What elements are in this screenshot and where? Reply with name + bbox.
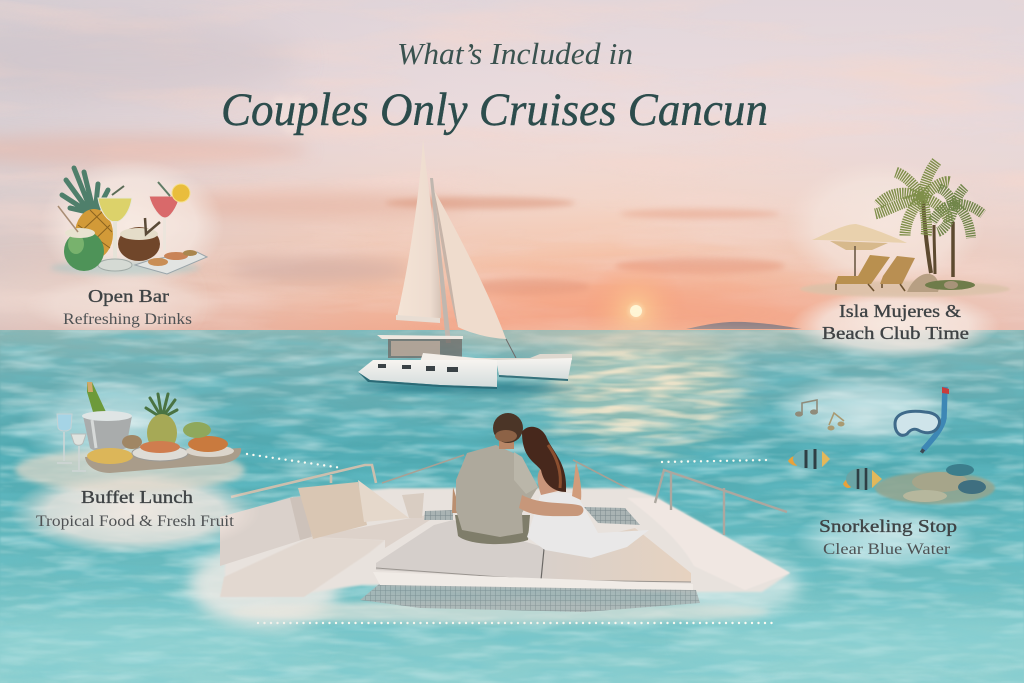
pillow (298, 482, 367, 539)
icon: snorkel mask (895, 387, 949, 452)
decorative route dots (247, 454, 778, 623)
icon: serving tray with food (85, 422, 241, 473)
icon: music notes (795, 400, 844, 430)
icon: wine glasses (57, 414, 86, 471)
left deck rail (231, 465, 376, 497)
label: Isla Mujeres &: Isla Mujeres & (839, 301, 961, 321)
right deck rail (655, 470, 787, 535)
boat deck foreground (190, 413, 800, 627)
sun (584, 259, 688, 363)
main title: Couples Only Cruises Cancun: Couples Only Cruises Cancun (221, 84, 768, 136)
icon: sun loungers (835, 255, 915, 291)
cabin (388, 338, 462, 358)
icon: champagne bucket (82, 382, 132, 452)
label: Beach Club Time: Beach Club Time (822, 323, 969, 343)
label: Open Bar: Open Bar (88, 286, 169, 306)
subtitle: What's Included in: What’s Included in (397, 36, 633, 71)
man's arm (519, 495, 583, 516)
icon: pineapple (62, 168, 113, 259)
catamaran sailboat (353, 138, 577, 393)
sofa back (220, 497, 311, 566)
title (221, 36, 768, 136)
icon: pineapple (146, 394, 177, 452)
icon: coral reef (875, 464, 995, 504)
mattresses (376, 520, 546, 579)
icon: red cocktail (149, 182, 190, 250)
panel: buffet lunch (10, 373, 260, 554)
panel: open bar (25, 159, 225, 335)
icon: beach umbrella (812, 224, 907, 277)
deck surface (225, 488, 790, 594)
distant island (686, 322, 802, 329)
back rails (382, 455, 644, 497)
label: Buffet Lunch: Buffet Lunch (81, 487, 193, 507)
label: Snorkeling Stop: Snorkeling Stop (819, 516, 957, 536)
icon: rocks (907, 274, 975, 292)
icon: yellow cocktail (98, 186, 132, 271)
sofa seat (220, 537, 385, 597)
pillow (358, 480, 409, 522)
panel: snorkeling stop (770, 374, 995, 570)
icon: palm trees (875, 161, 983, 277)
woman (522, 427, 649, 558)
icon: striped fish (788, 449, 830, 469)
icon: striped fish (843, 468, 882, 490)
right hull (450, 354, 572, 360)
label: Clear Blue Water: Clear Blue Water (823, 541, 951, 558)
icon: green coconut (58, 206, 104, 271)
label: Tropical Food & Fresh Fruit: Tropical Food & Fresh Fruit (36, 513, 235, 530)
label: Refreshing Drinks: Refreshing Drinks (63, 311, 192, 328)
hull shadow (353, 383, 577, 393)
turquoise sea (0, 330, 1024, 683)
man (452, 413, 538, 544)
deck mist (190, 543, 340, 627)
left hull (420, 353, 497, 362)
net panels (424, 510, 453, 520)
sunset sky background (0, 0, 1024, 354)
panel: isla mujeres and beach club (785, 160, 1010, 359)
pillow (402, 493, 424, 518)
icon: brown coconut (118, 218, 160, 261)
sails (397, 138, 441, 318)
icon: appetizer plate (135, 250, 207, 274)
